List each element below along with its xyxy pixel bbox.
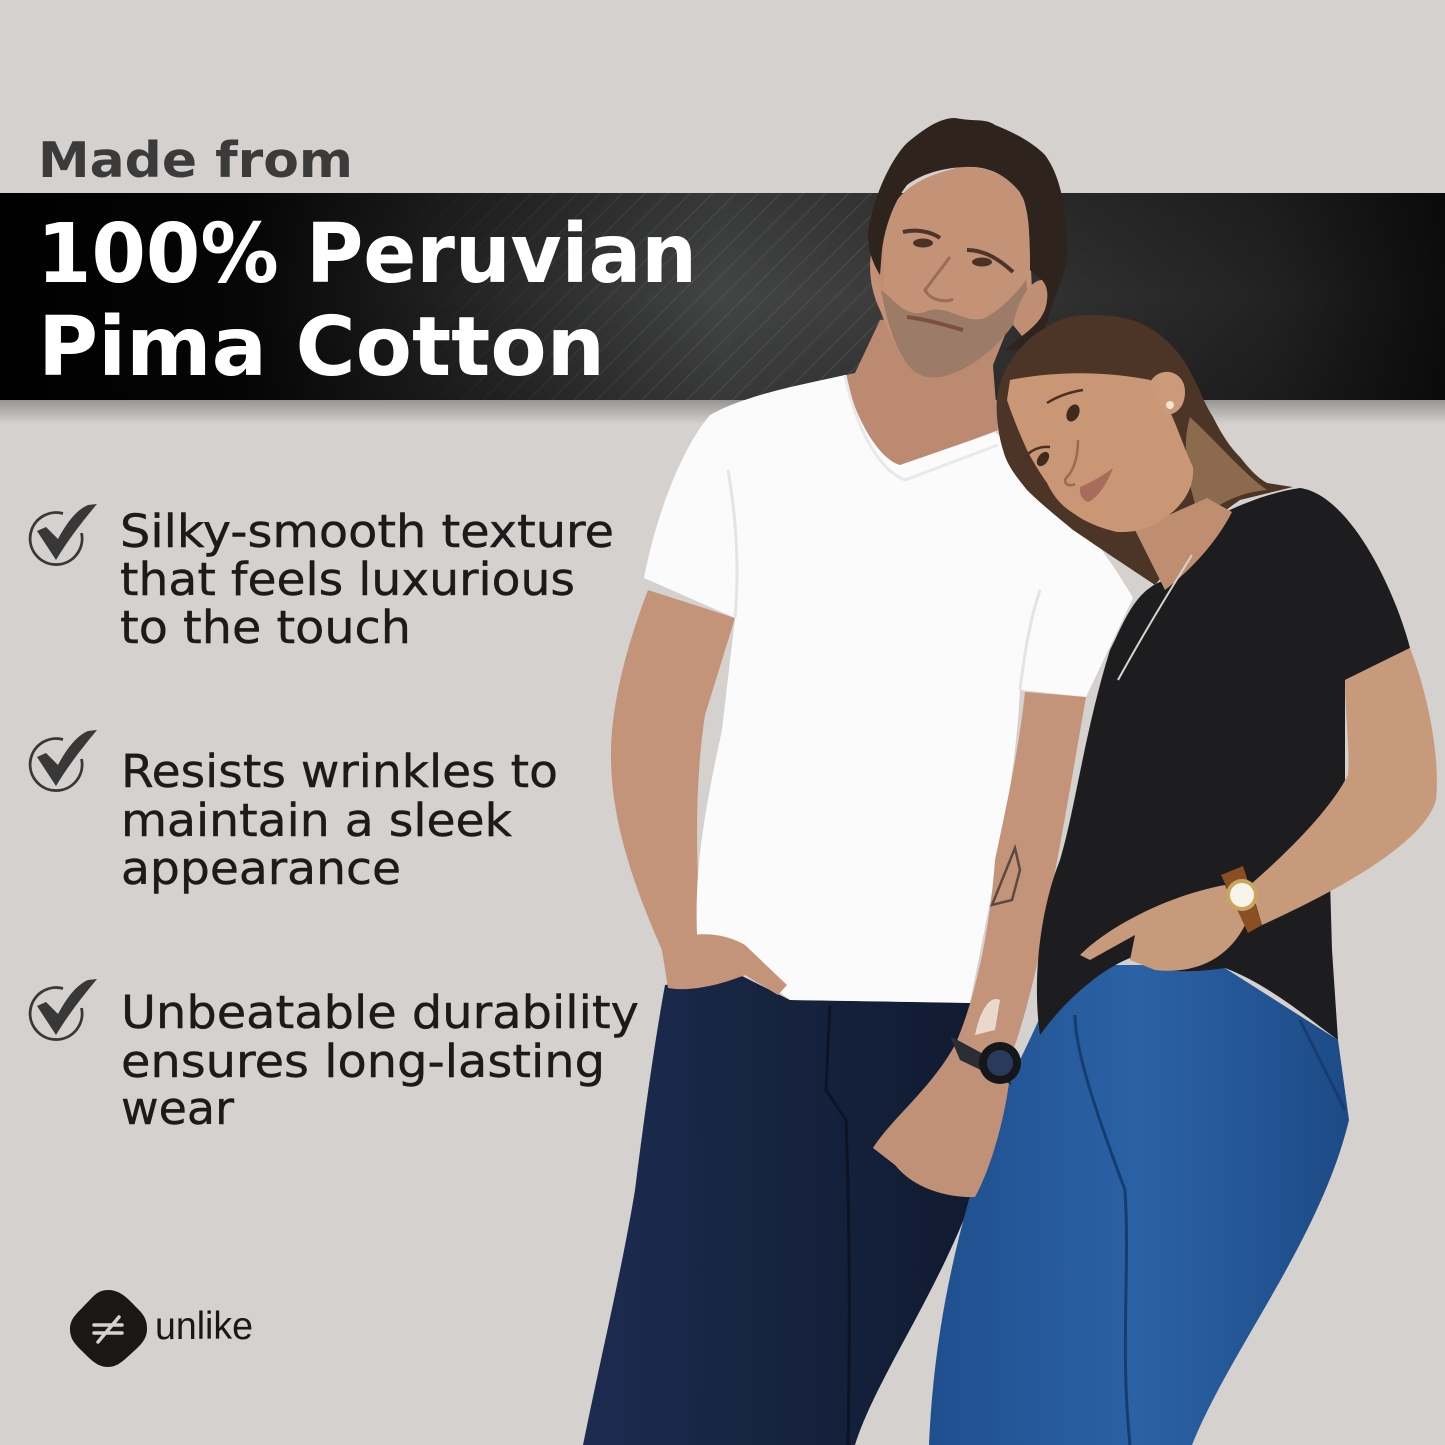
man: navy jeans bbox=[583, 975, 985, 1445]
man: neck and head bbox=[846, 118, 1067, 468]
woman: black tee bbox=[1037, 488, 1410, 1040]
icon: check mark bbox=[30, 979, 97, 1040]
icon: check mark bbox=[30, 504, 97, 565]
man: tattoo bbox=[992, 848, 1020, 905]
benefit text 3: wear bbox=[121, 1082, 234, 1135]
benefit text 2: maintain a sleek bbox=[121, 794, 512, 847]
woman: nose and mouth bbox=[1065, 440, 1078, 485]
man: left arm bbox=[611, 590, 735, 985]
man: light skin patch bbox=[975, 999, 1000, 1035]
headline: Pima Cotton bbox=[38, 300, 605, 395]
brand logo bbox=[70, 1290, 253, 1367]
man: nose and mouth bbox=[925, 257, 953, 301]
headline: 100% Peruvian bbox=[37, 207, 697, 302]
man: clasped hands bbox=[873, 1045, 1010, 1197]
wordmark: unlike bbox=[155, 1305, 253, 1348]
woman: hair bbox=[997, 315, 1293, 585]
benefit text 1 bbox=[120, 505, 614, 654]
man: hand in pocket bbox=[662, 934, 787, 995]
woman: hand in pocket bbox=[1080, 885, 1245, 971]
man: right arm bbox=[955, 692, 1086, 1070]
woman: blue jeans bbox=[929, 965, 1349, 1445]
woman: face bbox=[1007, 373, 1193, 532]
woman: necklace bbox=[1118, 555, 1192, 680]
icon: check mark bbox=[30, 730, 97, 791]
woman: ear and earring bbox=[1150, 372, 1185, 415]
woman: lighter hair strand bbox=[1186, 417, 1267, 520]
kicker: Made from: Made from bbox=[38, 132, 353, 189]
benefit text 3: ensures long-lasting bbox=[121, 1035, 605, 1088]
headline bbox=[37, 207, 697, 395]
man: stubble bbox=[881, 280, 1028, 377]
benefit text 3: Unbeatable durability bbox=[121, 986, 639, 1039]
benefit: wrinkle resistance bbox=[30, 730, 558, 895]
woman: forearm bbox=[1250, 648, 1437, 925]
benefit: durability bbox=[30, 979, 639, 1135]
man: wristwatch bbox=[950, 1036, 1021, 1085]
man: eyes and brows bbox=[903, 231, 1013, 272]
benefit text 3 bbox=[121, 986, 639, 1135]
band drop shadow bbox=[0, 400, 1445, 424]
benefit text 2: appearance bbox=[121, 842, 401, 895]
man: white v-neck tee bbox=[644, 375, 1133, 1003]
man: ears bbox=[873, 240, 1050, 336]
woman: neck bbox=[1135, 498, 1232, 590]
woman: eyes and brows bbox=[1025, 390, 1083, 458]
man: hair bbox=[868, 118, 1067, 350]
benefit text 1: Silky-smooth texture bbox=[120, 505, 614, 558]
woman: watch bbox=[1221, 866, 1262, 933]
benefit: silky texture bbox=[30, 504, 614, 654]
benefit text 2 bbox=[121, 745, 558, 895]
photo: couple bbox=[583, 118, 1437, 1445]
benefit text 2: Resists wrinkles to bbox=[121, 745, 558, 798]
icon: not-equal badge bbox=[70, 1290, 147, 1367]
benefit text 1: that feels luxurious bbox=[120, 553, 575, 606]
benefit text 1: to the touch bbox=[120, 601, 411, 654]
headline band bbox=[0, 193, 1445, 400]
